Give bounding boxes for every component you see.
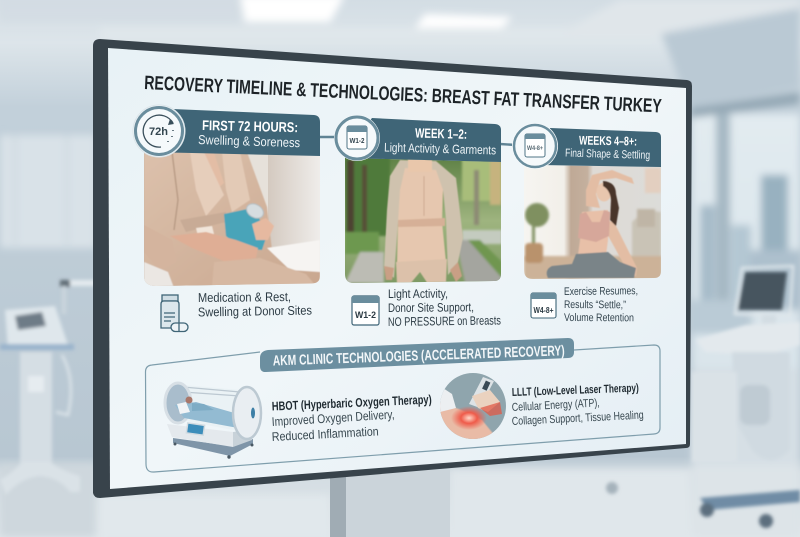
banner: week 1-2	[345, 118, 501, 162]
icon: medication bottle	[161, 295, 188, 332]
text block: HBOT: Reduced Inflammation	[271, 424, 379, 444]
panel: week 1-2	[334, 115, 503, 329]
text block: LLLT: LLLT (Low-Level Laser Therapy)	[512, 383, 639, 399]
text block: LLLT: Collagen Support, Tissue Healing	[512, 410, 644, 428]
icon: 72h clock badge: 72h	[149, 126, 168, 138]
icon: W1-2 calendar badge: W1-2	[350, 138, 365, 145]
subheading: light activity and garments: Light Activity & Garments	[384, 141, 496, 157]
text block: medication and rest	[198, 289, 312, 319]
panel: weeks 4-8+	[512, 123, 662, 324]
icon: W1-2 calendar: W1-2	[355, 310, 376, 321]
monitor stand	[330, 470, 450, 537]
text block: LLLT	[512, 383, 644, 428]
monitor frame	[93, 39, 692, 498]
icon: W4-8+ calendar: W4-8+	[534, 306, 554, 315]
heading: first 72 hours: FIRST 72 HOURS:	[202, 117, 298, 135]
image: HBOT chamber	[165, 383, 261, 459]
icon: W1-2 calendar badge	[334, 115, 380, 161]
photo: woman with ice pack	[144, 150, 322, 290]
icon: W1-2 calendar	[352, 296, 379, 325]
text block: light activity: Light Activity,	[388, 287, 448, 301]
technologies outline box	[146, 345, 660, 472]
panel: AKM clinic technologies	[146, 338, 660, 472]
banner: first 72 hours	[150, 109, 320, 156]
photo: woman walking in park	[345, 156, 503, 286]
text block: medication and rest: Swelling at Donor Sites	[198, 303, 312, 319]
heading: week 1-2: WEEK 1–2:	[415, 126, 467, 142]
text block: light activity: NO PRESSURE on Breasts	[388, 313, 501, 329]
heading pill	[260, 338, 574, 372]
icon: 72h clock badge	[133, 105, 185, 157]
photo: woman stretching	[524, 165, 662, 281]
text block: exercise resumes: Results “Settle,”	[564, 299, 626, 311]
subheading: swelling and soreness: Swelling & Soreness	[198, 132, 301, 150]
text block: HBOT: Improved Oxygen Delivery,	[271, 408, 395, 429]
text block: exercise resumes	[564, 285, 638, 324]
text block: light activity: Donor Site Support,	[388, 300, 474, 315]
heading pill: AKM CLINIC TECHNOLOGIES (ACCELERATED RECOVERY)	[273, 343, 565, 369]
text block: HBOT: HBOT (Hyperbaric Oxygen Therapy)	[272, 393, 432, 413]
icon: W4-8+ calendar badge: W4-8+	[527, 145, 543, 152]
connector lines	[320, 137, 516, 145]
subheading: final shape and settling: Final Shape & Settling	[565, 148, 650, 162]
text block: exercise resumes: Exercise Resumes,	[564, 285, 638, 298]
icon: W4-8+ calendar	[531, 293, 556, 318]
text block: HBOT	[271, 393, 432, 444]
text block: LLLT: Cellular Energy (ATP),	[512, 397, 600, 414]
panel: first 72 hours	[133, 105, 322, 332]
text block: light activity	[388, 287, 501, 329]
image: LLLT laser treatment	[440, 373, 506, 439]
icon: W4-8+ calendar badge	[512, 123, 558, 169]
text block: medication and rest: Medication & Rest,	[198, 289, 291, 305]
text block: exercise resumes: Volume Retention	[564, 312, 634, 324]
heading: weeks 4-8+: WEEKS 4–8+:	[579, 134, 637, 149]
banner: weeks 4-8+	[540, 128, 661, 167]
